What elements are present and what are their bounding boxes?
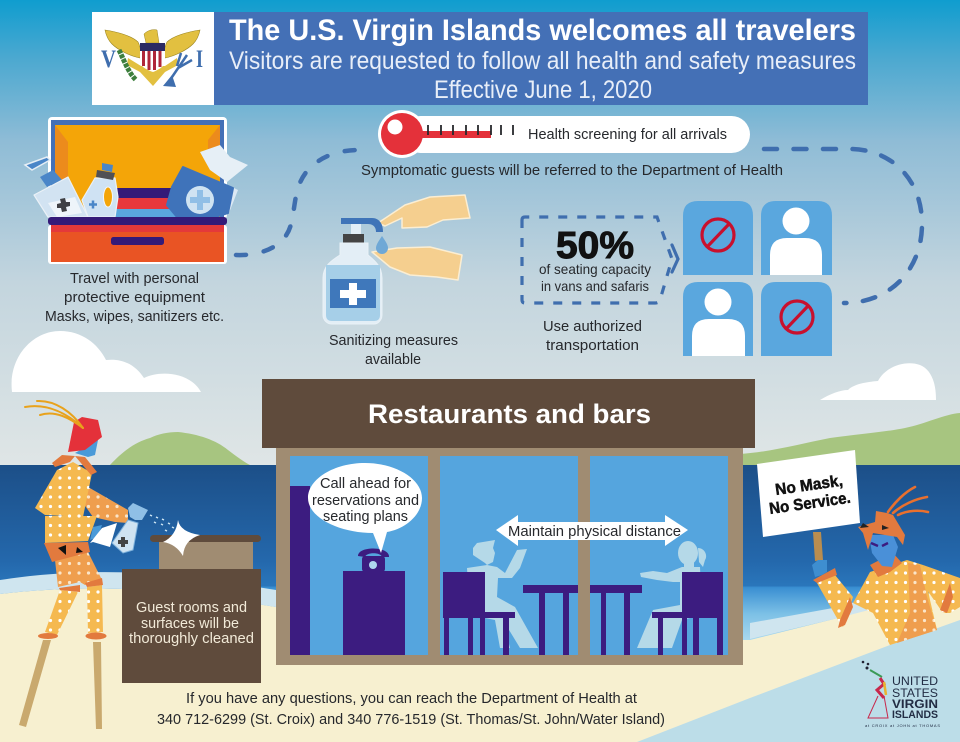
- background: sky: [0, 0, 960, 470]
- title panel: [214, 12, 868, 105]
- icon: passenger lower: [692, 288, 745, 356]
- shallow water corner: [637, 620, 960, 742]
- speech bubble: Call ahead for: [320, 475, 411, 492]
- text: symptomatic guests: Symptomatic guests will be referred to the Department of Health: [361, 162, 783, 179]
- seated woman: [637, 541, 706, 648]
- speech bubble: reservations and: [312, 492, 419, 509]
- flag panel: V: [101, 46, 116, 73]
- speech bubble: [308, 463, 422, 553]
- arrow: maintain physical distance: Maintain physical distance: [508, 523, 681, 540]
- header banner: [92, 12, 868, 105]
- panel: guest rooms: thoroughly cleaned: [129, 630, 254, 647]
- logo: United States Virgin Islands: [862, 661, 940, 728]
- text: department of health contacts: 340 712-6299 (St. Croix) and 340 776-1519 (St. Thomas/St. John/Water Island): [157, 711, 665, 728]
- text: personal protective equipment: Masks, wipes, sanitizers etc.: [45, 308, 224, 325]
- character: masked carnival figure: [812, 487, 960, 645]
- title panel: Effective June 1, 2020: [434, 76, 652, 104]
- flag panel: I: [196, 46, 203, 73]
- text: personal protective equipment: [45, 270, 224, 325]
- roof with heading: [262, 379, 755, 448]
- speech bubble: seating plans: [323, 508, 408, 525]
- icon: no seat: [702, 219, 734, 251]
- logo: United States Virgin Islands: STATES: [892, 686, 938, 700]
- callout: 50 percent seating: [522, 217, 678, 303]
- kit: detergent bottle: [82, 163, 118, 217]
- character: moko jumbie on stilts: [19, 401, 174, 729]
- thermometer and screening pill: [378, 110, 750, 158]
- dashed connector: left: [236, 150, 360, 255]
- thermometer and screening pill: Health screening for all arrivals: [528, 126, 727, 143]
- logo: United States Virgin Islands: at CROIX at JOHN at THOMAS: [865, 723, 940, 728]
- beach sand: [0, 585, 960, 742]
- cloud: left: [12, 331, 201, 392]
- seated man: [467, 540, 538, 648]
- table with sparkle: [150, 520, 261, 570]
- text: personal protective equipment: Travel with personal: [70, 270, 199, 287]
- callout: 50 percent seating: in vans and safaris: [541, 278, 649, 294]
- logo: United States Virgin Islands: UNITED: [892, 674, 938, 688]
- roof with heading: Restaurants and bars: [368, 399, 651, 429]
- title panel: Visitors are requested to follow all health and safety measures: [229, 47, 856, 75]
- text: sanitizing measures: [329, 332, 458, 368]
- logo: United States Virgin Islands: ISLANDS: [892, 709, 938, 721]
- text: department of health contacts: [157, 690, 665, 728]
- text: use authorized transportation: Use authorized: [543, 318, 642, 335]
- text: sanitizing measures: available: [365, 351, 421, 368]
- sign: no mask no service: No Service.: [768, 490, 852, 518]
- callout: 50 percent seating: 50%: [556, 225, 634, 267]
- right table and chair: [590, 572, 723, 655]
- text: department of health contacts: If you have any questions, you can reach the Department of Health at: [186, 690, 638, 707]
- sign: no mask no service: [757, 450, 860, 561]
- white glove and spray bottle: [90, 503, 174, 553]
- callout: 50 percent seating: of seating capacity: [539, 261, 651, 277]
- seating diagram: [683, 201, 832, 356]
- text: sanitizing measures: Sanitizing measures: [329, 332, 458, 349]
- icon: sanitizer and hands: [323, 195, 470, 324]
- icon: passenger: [770, 208, 822, 275]
- sea: [0, 465, 960, 640]
- icon: no seat lower: [781, 301, 813, 333]
- text: use authorized transportation: transportation: [546, 337, 639, 354]
- building: restaurants and bars: [262, 379, 755, 665]
- kit: spray bottle: [25, 157, 88, 217]
- panel: guest rooms: surfaces will be: [141, 615, 239, 632]
- text: personal protective equipment: protective equipment: [64, 289, 206, 306]
- sign: no mask no service: No Mask,: [774, 473, 844, 499]
- flag panel: [92, 12, 214, 105]
- dashed connector: right: [764, 149, 922, 303]
- panel: guest rooms: [122, 569, 261, 683]
- hill: left: [110, 432, 250, 465]
- hill: right: [740, 413, 960, 470]
- cloud: right: [820, 363, 936, 400]
- icon: first aid kit: [25, 117, 248, 264]
- panel: guest rooms: Guest rooms and: [136, 599, 247, 616]
- logo: United States Virgin Islands: VIRGIN: [892, 697, 938, 711]
- left chair and table: [443, 572, 578, 655]
- arrow: maintain physical distance: [496, 515, 688, 546]
- kit: wipes pouch: [167, 145, 248, 217]
- text: use authorized transportation: [543, 318, 642, 354]
- foam: [0, 572, 900, 639]
- title panel: The U.S. Virgin Islands welcomes all travelers: [229, 14, 856, 47]
- reception counter and telephone: [290, 486, 405, 655]
